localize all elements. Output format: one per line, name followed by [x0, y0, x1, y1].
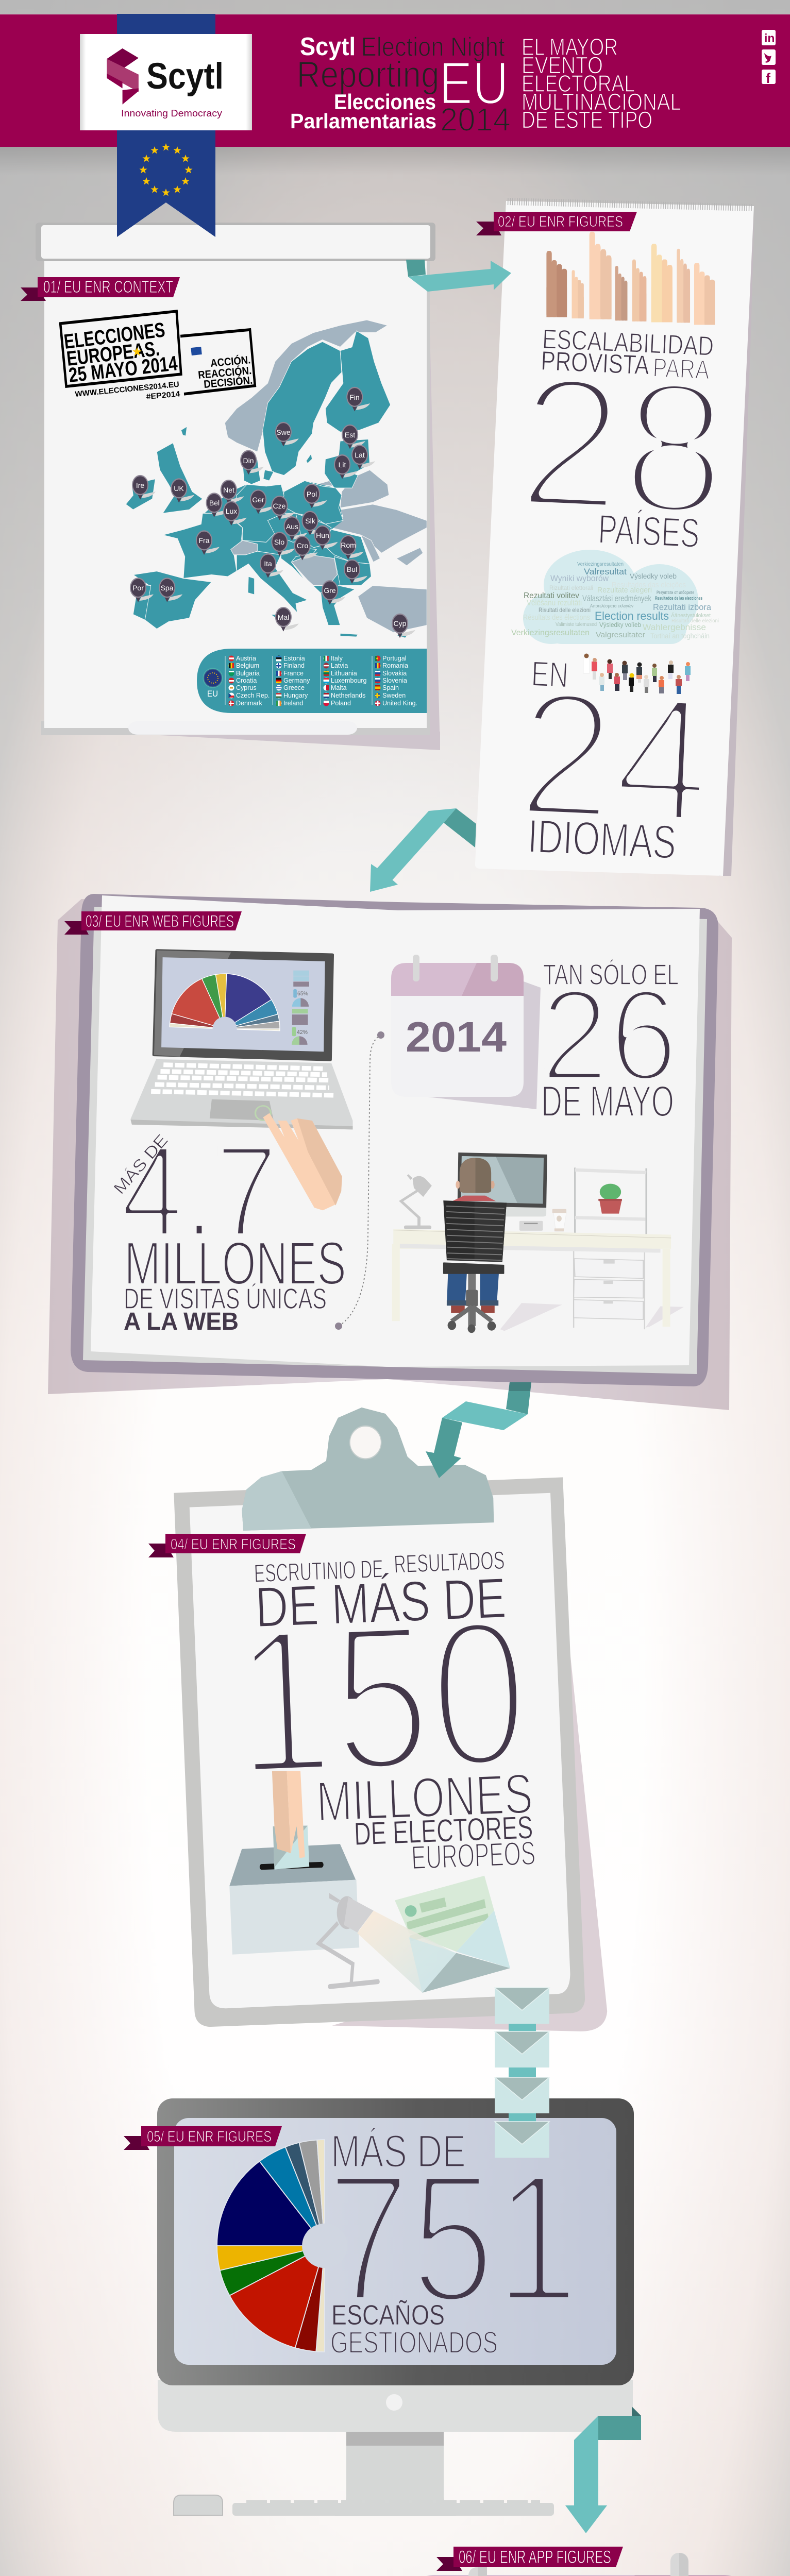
text: event title: Reporting	[297, 55, 439, 95]
country legend: Latvia	[331, 662, 348, 669]
map pin labels: Aus	[286, 522, 298, 531]
logo mark	[107, 48, 139, 105]
text: tagline	[522, 33, 681, 133]
country legend: Ireland	[283, 700, 303, 707]
campaign logo: elecciones europeas: 25 MAYO 2014	[68, 352, 179, 387]
word cloud: Resultados das eleições	[612, 581, 686, 589]
map pin labels	[132, 393, 407, 628]
country legend: France	[283, 670, 304, 677]
country legend: Hungary	[283, 692, 308, 699]
map pin labels: Pol	[307, 490, 317, 498]
campaign logo: elecciones europeas: WWW.ELECCIONES2014.EU	[75, 380, 179, 399]
word cloud: Risultati delle elezioni	[539, 606, 591, 614]
panel: 04 clipboard	[148, 1408, 607, 2031]
word cloud: Resultados de las elecciones	[655, 596, 702, 601]
text: tan solo el / de mayo: TAN SÓLO EL	[543, 958, 679, 991]
text: escanos gestionados: ESCAÑOS	[331, 2299, 445, 2331]
text: escrutinio: ESCRUTINIO DE	[254, 1555, 384, 1588]
text: event title: Scytl	[300, 33, 356, 61]
campaign logo: elecciones europeas: ELECCIONES	[63, 318, 166, 353]
campaign logo: elecciones europeas: #EP2014	[146, 389, 181, 401]
country legend: Italy	[331, 655, 343, 662]
word cloud: Verkiezingsresultaten	[577, 561, 624, 567]
map pin labels: Ger	[252, 496, 264, 504]
text: escrutinio	[254, 1547, 508, 1639]
map pin labels: Ire	[136, 481, 144, 489]
panel: 03 web figures notebook	[48, 894, 732, 1410]
map pin labels: Est	[345, 431, 355, 439]
map pin labels: Swe	[276, 428, 291, 436]
big number 4.7: 4.7	[121, 1118, 278, 1265]
country legend: Denmark	[236, 700, 262, 707]
country legend: Spain	[382, 684, 399, 691]
campaign logo: elecciones europeas	[60, 311, 255, 401]
map pin labels: Lit	[339, 461, 346, 469]
country legend: Czech Rep.	[236, 692, 270, 699]
big number 26: 26	[540, 962, 678, 1109]
text: event title: EU	[439, 49, 509, 117]
panel: 01 EU ENR context map	[21, 223, 440, 750]
calendar 2014	[391, 955, 541, 1109]
laptop	[130, 951, 353, 1129]
heading: escalabilidad provista para	[540, 324, 714, 385]
tag 03	[64, 911, 242, 935]
text: event title: Parlamentarias	[290, 109, 436, 133]
map pin labels: Rom	[341, 541, 356, 549]
country legend: Bulgaria	[236, 670, 260, 677]
text: millones de electores europeos	[315, 1762, 536, 1876]
country legend: Slovakia	[382, 670, 407, 677]
country legend: Netherlands	[331, 692, 365, 699]
map pin labels: Hun	[316, 531, 329, 539]
header band	[0, 14, 790, 175]
tag 04: 04/ EU ENR FIGURES	[171, 1536, 296, 1553]
arrow: 03 to 04	[426, 1382, 531, 1478]
clip	[242, 1408, 494, 1531]
arrow: 01 to 02	[406, 260, 511, 292]
map pin labels: Cro	[297, 541, 308, 550]
arrow: envelopes chain 04 to 05	[495, 1988, 549, 2158]
map pin labels: Slk	[305, 517, 316, 525]
country legend: Lithuania	[331, 670, 357, 677]
map pin labels: Por	[132, 584, 144, 592]
campaign logo: elecciones europeas: EUROPEAS.	[65, 337, 161, 370]
text: event title	[290, 32, 511, 138]
tag 06	[436, 2547, 623, 2571]
arrow: 02 to 03	[370, 808, 476, 892]
laptop: 42%	[297, 1029, 308, 1036]
big number 751: 751	[326, 2134, 579, 2342]
logo: Scytl: Innovating Democracy	[121, 108, 222, 118]
country legend: Belgium	[236, 662, 259, 669]
word cloud: Torthaí an toghcháin	[650, 632, 710, 640]
map pin labels: Spa	[161, 584, 174, 592]
label: paises: PAÍSES	[597, 506, 701, 556]
word cloud: Výsledky voleb	[630, 572, 677, 580]
map pin labels: Bul	[347, 565, 357, 573]
country legend: Greece	[283, 684, 305, 691]
text: mas de 4.7 millones de visitas: MÁS DE	[110, 1131, 172, 1198]
map pins	[130, 387, 415, 638]
word cloud: Αποτελέσματα εκλογών	[590, 603, 633, 608]
text: tagline: EVENTO	[522, 52, 603, 79]
text: mas de 4.7 millones de visitas	[110, 1131, 346, 1335]
map pin labels: Mal	[278, 613, 289, 621]
text: escanos gestionados: GESTIONADOS	[330, 2326, 498, 2360]
word cloud: Résultats des élections	[523, 613, 590, 622]
country legend: Poland	[331, 700, 351, 707]
word cloud: Резултати от изборите	[657, 590, 694, 595]
text: mas de 4.7 millones de visitas: DE VISITAS ÚNICAS	[124, 1282, 327, 1315]
country legend: Cyprus	[236, 684, 257, 691]
arrow: 05 to 06	[565, 2406, 641, 2533]
text: escrutinio: DE MÁS DE	[254, 1566, 508, 1639]
EU stars	[139, 143, 193, 196]
tag 06: 06/ EU ENR APP FIGURES	[459, 2547, 611, 2567]
word cloud: Wahlergebnisse	[643, 622, 706, 632]
word cloud: Valresultat	[584, 567, 627, 577]
country legend: Slovenia	[382, 677, 407, 684]
big number 28: 28	[514, 335, 731, 555]
map pin labels: Cyp	[394, 619, 407, 628]
word cloud: Rezultati volitev	[524, 591, 579, 600]
campaign logo: elecciones europeas: ACCIÓN.	[210, 353, 251, 369]
text: event title: 2014	[440, 101, 511, 138]
country legend: Sweden	[382, 692, 406, 699]
hand on trackpad	[263, 1113, 342, 1210]
word cloud	[511, 550, 719, 644]
calendar 2014: 2014	[406, 1013, 507, 1061]
ribbon: EU flag	[117, 14, 215, 237]
laptop: 65%	[297, 991, 308, 997]
word cloud: Rizultati elettorali	[549, 584, 593, 591]
illustration: ballot box, hand, lamp and envelope	[229, 1771, 510, 1993]
country legend: Estonia	[283, 655, 305, 662]
pie chart: seats	[217, 2140, 347, 2352]
big number 24: 24	[514, 652, 714, 862]
calendar rings	[468, 2553, 688, 2576]
spiral binding	[508, 201, 753, 208]
map of Europe	[126, 320, 427, 638]
tag 02: 02/ EU ENR FIGURES	[498, 213, 623, 230]
map pin labels: Lux	[226, 507, 237, 515]
keyboard and mouse	[174, 2495, 554, 2516]
social icons: in	[764, 31, 775, 45]
map pin labels: Bel	[209, 499, 220, 507]
map pin labels: UK	[174, 484, 184, 493]
tag 01	[21, 277, 180, 301]
word cloud: Rezultati izbora	[653, 602, 712, 612]
text: tan solo el / de mayo	[541, 958, 679, 1125]
panel: 06 results calendar	[412, 2547, 790, 2576]
word cloud: Valimiste tulemused	[556, 622, 597, 628]
map pin labels: Gre	[324, 586, 336, 595]
country legend: Portugal	[382, 655, 407, 662]
hands	[546, 232, 715, 325]
heading: escalabilidad provista para: PARA	[652, 353, 710, 385]
text: millones de electores europeos: MILLONES	[315, 1762, 534, 1834]
text: mas de: MÁS DE	[331, 2125, 466, 2177]
panel: 02 EU ENR figures calendar page	[475, 201, 754, 876]
country legend: Germany	[283, 677, 310, 684]
word cloud: Választási eredmények	[582, 594, 651, 603]
map pin labels: Lat	[355, 451, 365, 459]
country legend: United King.	[382, 700, 417, 707]
dotted connector	[335, 1031, 384, 1330]
map pin labels: Fin	[349, 393, 360, 401]
heading: escalabilidad provista para: ESCALABILIDAD	[542, 324, 714, 362]
campaign logo: elecciones europeas: DECISIÓN.	[203, 374, 253, 391]
tag 04	[148, 1534, 306, 1557]
text: tagline: EL MAYOR	[522, 33, 618, 60]
map pin labels: Cze	[273, 502, 286, 510]
map pin labels: Din	[243, 456, 254, 465]
text: tagline: MULTINACIONAL	[522, 89, 681, 115]
word cloud: Wyniki wyborów	[550, 573, 609, 583]
text: mas de 4.7 millones de visitas: MILLONES	[124, 1229, 346, 1298]
campaign logo: elecciones europeas: REACCIÓN.	[197, 364, 252, 381]
country legend: Austria	[236, 655, 256, 662]
word cloud: Výsledky voľieb	[599, 621, 641, 629]
panel: 05 monitor	[124, 2098, 634, 2516]
tag 05: 05/ EU ENR FIGURES	[147, 2128, 272, 2145]
country legend: Malta	[331, 684, 347, 691]
text: tagline: ELECTORAL	[522, 70, 635, 97]
text: tan solo el / de mayo: DE MAYO	[541, 1077, 674, 1125]
logo: Scytl	[80, 34, 252, 130]
country legend: Finland	[283, 662, 305, 669]
social icons: f	[766, 71, 771, 86]
people	[583, 653, 691, 694]
text: escanos gestionados	[330, 2299, 498, 2360]
word cloud: Valgresultater	[596, 631, 645, 639]
label: idiomas: IDIOMAS	[527, 810, 677, 869]
map pin labels: Ita	[264, 560, 272, 568]
tag 03: 03/ EU ENR WEB FIGURES	[86, 912, 234, 930]
country legend	[197, 649, 427, 713]
country legend: Croatia	[236, 677, 257, 684]
text: millones de electores europeos: EUROPEOS	[411, 1834, 536, 1876]
word cloud: Rezultate alegeri	[597, 586, 652, 595]
map pin labels: Net	[223, 486, 234, 494]
logo: Scytl: Scytl	[146, 56, 224, 97]
word cloud: Election results	[595, 609, 669, 622]
tag 01: 01/ EU ENR CONTEXT	[43, 277, 173, 296]
text: event title: Election Night	[361, 32, 505, 62]
big number 150: 150	[230, 1575, 532, 1820]
text: millones de electores europeos: DE ELECTORES	[354, 1810, 533, 1852]
tag 02	[476, 212, 637, 235]
heading: escalabilidad provista para: PROVISTA	[540, 346, 650, 381]
text: escrutinio: RESULTADOS	[393, 1547, 505, 1579]
tag 05	[124, 2126, 282, 2150]
country legend: EU	[207, 689, 218, 699]
text: tagline: DE ESTE TIPO	[522, 107, 652, 133]
word cloud: Äänestystulokset	[671, 613, 711, 619]
label: en: EN	[530, 654, 569, 695]
country legend: Romania	[382, 662, 408, 669]
word cloud: Vēlēšanu rezultāti	[527, 599, 582, 607]
country legend: Luxembourg	[331, 677, 367, 684]
social icons	[762, 30, 776, 86]
map pin labels: Fra	[199, 536, 210, 545]
text: mas de 4.7 millones de visitas: A LA WEB	[124, 1308, 239, 1335]
text: event title: Elecciones	[334, 90, 436, 114]
word cloud: Verkiezingsresultaten	[511, 629, 590, 637]
illustration: person at desk	[392, 1153, 684, 1333]
map pin labels: Slo	[274, 538, 284, 546]
word cloud: Risultati delle elezioni	[671, 618, 719, 624]
